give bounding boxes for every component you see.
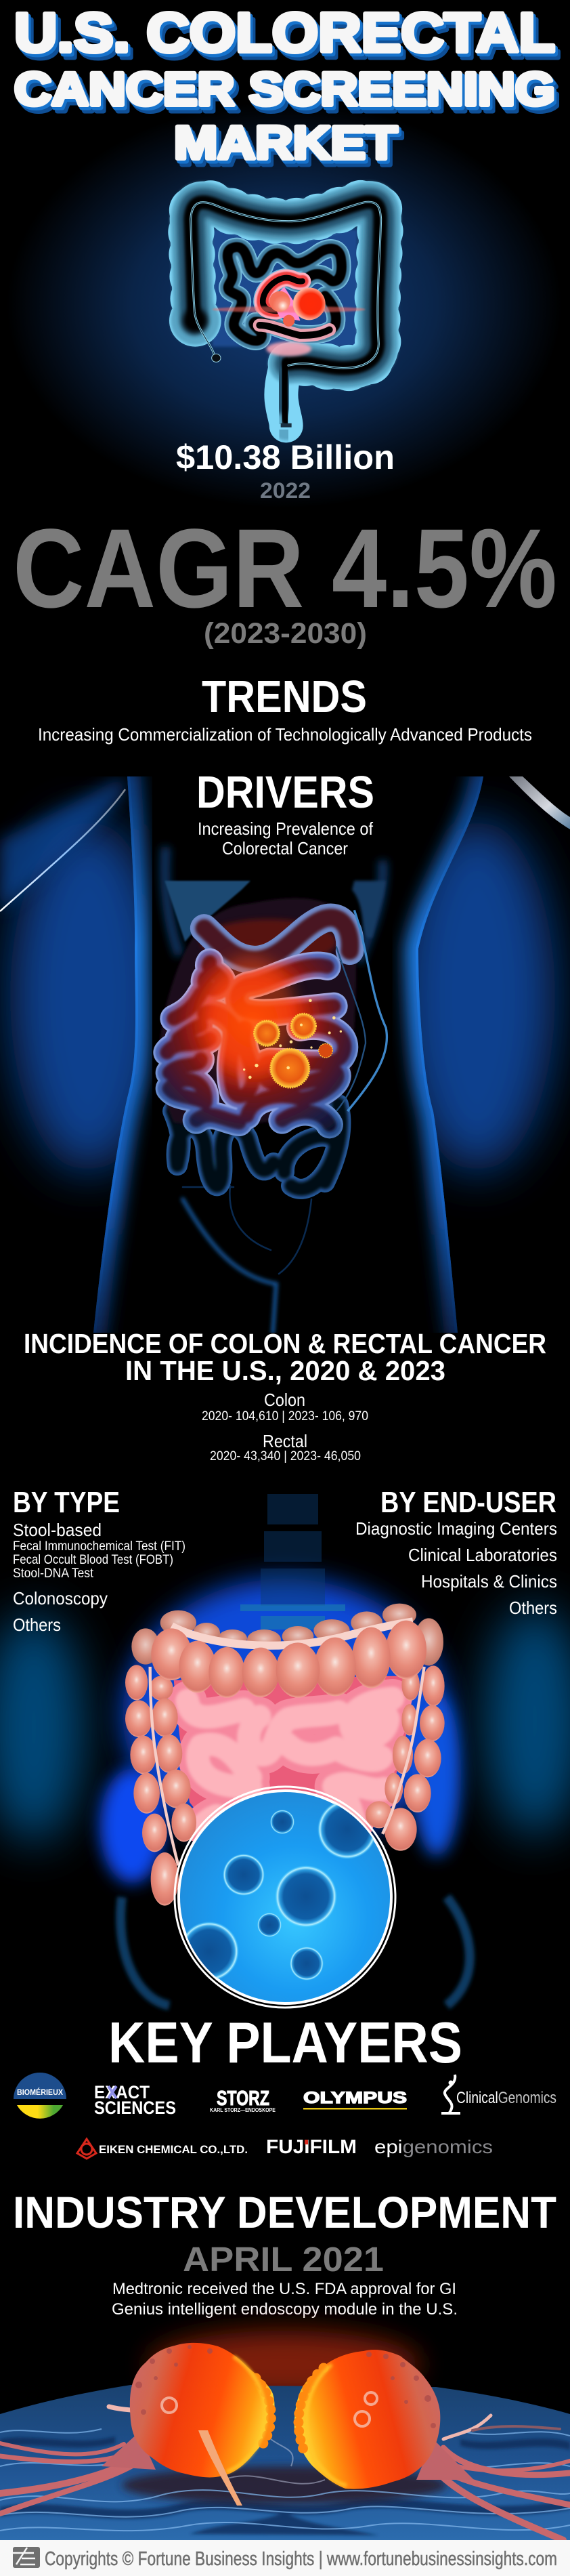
by end-user: Clinical Laboratories [408, 1545, 557, 1565]
icon: glowing colon with tumours [169, 202, 381, 430]
right cell [294, 2350, 440, 2489]
torso silhouette [93, 776, 483, 1333]
intestine backing [160, 898, 356, 1125]
illustration: large intestine with magnifier [0, 1494, 570, 2008]
colon haustra, back row [131, 1604, 443, 1665]
logo: Exact Sciences [94, 2082, 176, 2118]
logo: Fujifilm: FUJIFILM [266, 2136, 357, 2158]
by type: Stool-based [13, 1520, 102, 1540]
dark wave bands [0, 2436, 570, 2535]
drivers text: Colorectal Cancer [222, 838, 348, 858]
by type: BY TYPE [13, 1486, 120, 1519]
header glow [7, 102, 562, 508]
small intestine [174, 1676, 406, 1825]
drivers text: Increasing Prevalence of [198, 818, 374, 839]
title faces: MARKET [174, 117, 397, 169]
by type: Stool-DNA Test [13, 1566, 94, 1581]
title faces: U.S. COLORECTAL [14, 2, 555, 64]
title line shadows: MARKET [179, 123, 402, 175]
title line mid shadows: CANCER SCREENING [16, 66, 557, 118]
title line mid shadows: U.S. COLORECTAL [16, 5, 557, 66]
title [14, 2, 560, 175]
drivers text [198, 818, 374, 858]
by end-user: Diagnostic Imaging Centers [355, 1518, 557, 1539]
footer bar [0, 2540, 570, 2576]
logo: Olympus: OLYMPUS [303, 2089, 407, 2107]
sparks [243, 999, 342, 1079]
logo: Exact Sciences: EXACT [94, 2082, 150, 2102]
cell glow [149, 2331, 420, 2398]
tumour cells [254, 1014, 332, 1087]
rectal incidence: Rectal [263, 1431, 307, 1451]
loops [167, 962, 345, 1125]
tissue surface [0, 2385, 570, 2540]
left cell [130, 2343, 275, 2506]
left cell inner edge [256, 2378, 271, 2447]
by type: Fecal Immunochemical Test (FIT) [13, 1539, 185, 1554]
colon incidence: 2020- 104,610 | 2023- 106, 970 [202, 1409, 368, 1424]
title line mid shadows: MARKET [176, 119, 399, 171]
logo: Eiken [77, 2139, 248, 2159]
transverse colon [204, 917, 350, 960]
logo: Storz: KARL STORZ—ENDOSKOPE [210, 2106, 276, 2113]
colon incidence [202, 1390, 368, 1424]
logo: Exact Sciences: SCIENCES [94, 2098, 176, 2118]
by type: Colonoscopy [13, 1588, 108, 1608]
logo: bioMerieux: BIOMÉRIEUX [17, 2088, 63, 2097]
left arm [0, 776, 125, 911]
title faces [14, 2, 555, 169]
left cell spike [198, 2430, 242, 2506]
by end-user [355, 1486, 557, 1618]
by end-user: Hospitals & Clinics [421, 1571, 557, 1592]
by type: Others [13, 1615, 61, 1635]
by type: Fecal Occult Blood Test (FOBT) [13, 1553, 173, 1567]
pink inflamed loop [259, 278, 330, 335]
market value: $10.38 Billion [176, 438, 395, 476]
base year: 2022 [260, 478, 311, 503]
trends text: Increasing Commercialization of Technologically Advanced Products [38, 724, 532, 745]
logo: Clinical Genomics: ClinicalGenomics [456, 2089, 556, 2107]
by end-user: Others [509, 1598, 557, 1618]
illustration: dividing cancer cells [0, 2331, 570, 2540]
appendix tip [212, 354, 221, 362]
liver and stomach [165, 881, 250, 942]
development text: Medtronic received the U.S. FDA approval for GI [112, 2280, 456, 2298]
inner tube line [191, 202, 381, 368]
development text [112, 2280, 458, 2319]
logo: Eiken: EIKEN CHEMICAL CO.,LTD. [99, 2143, 248, 2156]
colon haustra, outer side columns [125, 1665, 445, 1906]
rib cage shadow [165, 847, 383, 962]
development date: APRIL 2021 [183, 2240, 384, 2279]
logo: Clinical Genomics [441, 2075, 556, 2113]
logo: Epigenomics: epigenomics [374, 2136, 493, 2157]
footer logo [13, 2547, 40, 2568]
groin lines [183, 1199, 276, 1333]
right arm [509, 776, 570, 829]
colon incidence: Colon [264, 1390, 305, 1410]
large intestine [169, 202, 381, 430]
tendril roots [102, 2432, 474, 2480]
logo: bioMerieux [14, 2073, 66, 2119]
abdominal wall [347, 910, 387, 1111]
right cell inner edge [299, 2368, 324, 2453]
intestine loops with tumours [160, 881, 387, 1125]
spine and pelvis [120, 1494, 470, 2006]
by type [13, 1486, 185, 1635]
title line shadows: U.S. COLORECTAL [19, 8, 560, 70]
tumours [293, 287, 326, 320]
surface bumps [366, 2352, 436, 2428]
colon haustra, front row [151, 1621, 426, 1698]
top ribbon [171, 1621, 413, 1646]
illustration: human torso with glowing intestine [0, 776, 570, 1333]
title line shadows [19, 8, 560, 175]
drivers heading: DRIVERS [196, 767, 374, 818]
surface bumps [135, 2345, 213, 2415]
hot glow [205, 955, 296, 1077]
key players heading: KEY PLAYERS [108, 2011, 462, 2075]
title faces: CANCER SCREENING [14, 63, 555, 115]
pink highlights [271, 287, 300, 320]
logo: Storz [210, 2086, 276, 2113]
intestine artwork [125, 1604, 445, 1906]
CAGR period: (2023-2030) [204, 617, 367, 650]
background glows [0, 1579, 570, 1884]
side glows [10, 820, 555, 1172]
incidence heading [24, 1328, 546, 1386]
title line shadows: CANCER SCREENING [19, 69, 560, 121]
lower intestine [173, 1104, 341, 1189]
development text: Genius intelligent endoscopy module in the U.S. [112, 2300, 458, 2319]
logos [14, 2073, 556, 2159]
magnifier lens [175, 1787, 395, 2008]
tendrils [0, 2407, 570, 2540]
rectal incidence [210, 1431, 361, 1463]
incidence heading: IN THE U.S., 2020 & 2023 [125, 1355, 445, 1386]
bacteria [179, 1800, 377, 1981]
rectal incidence: 2020- 43,340 | 2023- 46,050 [210, 1449, 361, 1463]
logo: Storz: STORZ [217, 2086, 269, 2110]
shadow under cells [122, 2466, 447, 2504]
title line mid shadows [16, 5, 557, 171]
colon ribbons [150, 1667, 424, 1865]
colon haustra, inner side columns [150, 1669, 420, 1842]
small intestine serpentine [227, 247, 342, 341]
trends heading: TRENDS [202, 671, 367, 722]
